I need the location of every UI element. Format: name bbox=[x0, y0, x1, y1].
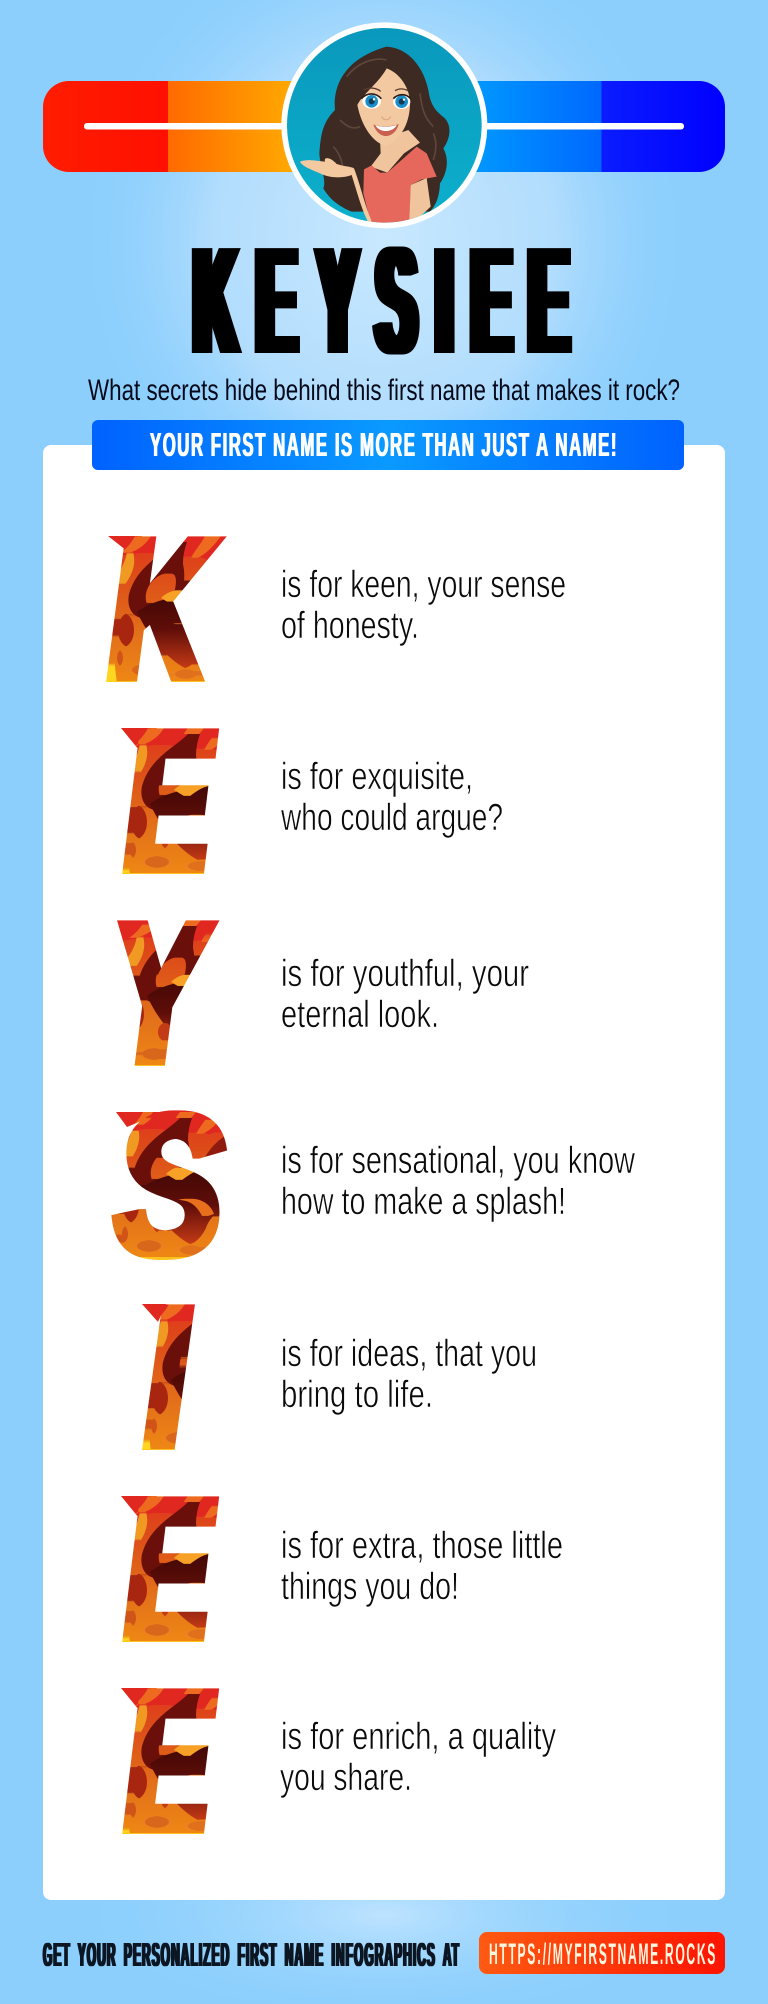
row 2: E bbox=[121, 690, 503, 913]
shirt bbox=[363, 147, 437, 227]
row 3: Y bbox=[113, 882, 529, 1105]
text: S: how to make a splash! bbox=[281, 1181, 566, 1223]
left arm and hand bbox=[300, 158, 373, 227]
text: S bbox=[281, 1140, 635, 1223]
text: E bbox=[280, 756, 503, 839]
row 1: K bbox=[108, 498, 566, 721]
flame letter E: E bbox=[126, 1650, 214, 1873]
text: I: bring to life. bbox=[281, 1374, 433, 1416]
text: Y bbox=[281, 953, 529, 1036]
face bbox=[357, 68, 410, 146]
text: K: is for keen, your sense bbox=[281, 564, 566, 606]
white content panel bbox=[43, 445, 725, 1900]
flame letter I: I bbox=[146, 1266, 188, 1489]
text: S: is for sensational, you know bbox=[281, 1140, 635, 1182]
text: E: things you do! bbox=[281, 1566, 459, 1608]
mouth bbox=[373, 124, 399, 136]
text: Y: is for youthful, your bbox=[281, 953, 529, 995]
footer URL button bbox=[479, 1932, 725, 1974]
flame letter K: K bbox=[110, 498, 217, 721]
header gradient bar bbox=[43, 81, 725, 172]
avatar portrait bbox=[281, 22, 487, 228]
right arm bbox=[409, 178, 431, 220]
hair bbox=[319, 47, 449, 212]
flame letter E bbox=[121, 1458, 214, 1681]
text: Y: eternal look. bbox=[281, 994, 439, 1036]
text: K bbox=[281, 564, 566, 647]
flame letter E: E bbox=[126, 690, 214, 913]
neck bbox=[371, 130, 420, 173]
text: E: is for extra, those little bbox=[281, 1525, 563, 1567]
eyes bbox=[361, 88, 411, 109]
text: E: you share. bbox=[280, 1757, 412, 1799]
title: KEYSIEE bbox=[194, 215, 569, 386]
row 7: E bbox=[121, 1650, 556, 1873]
text: E bbox=[280, 1716, 556, 1799]
text: E: who could argue? bbox=[280, 797, 503, 839]
flame letter E bbox=[121, 690, 214, 913]
text: I: is for ideas, that you bbox=[281, 1333, 537, 1375]
text: K: of honesty. bbox=[281, 605, 419, 647]
banner bbox=[92, 420, 684, 470]
flame letter E: E bbox=[126, 1458, 214, 1681]
flame letter S: S bbox=[116, 1074, 222, 1297]
text: E bbox=[281, 1525, 563, 1608]
flame letter Y: Y bbox=[113, 882, 211, 1105]
row 4: S bbox=[116, 1074, 635, 1297]
text: I bbox=[281, 1333, 537, 1416]
row 6: E bbox=[121, 1458, 563, 1681]
text: E: is for enrich, a quality bbox=[281, 1716, 556, 1758]
flame letter E bbox=[121, 1650, 214, 1873]
row 5: I bbox=[142, 1266, 537, 1489]
text: E: is for exquisite, bbox=[281, 756, 473, 798]
